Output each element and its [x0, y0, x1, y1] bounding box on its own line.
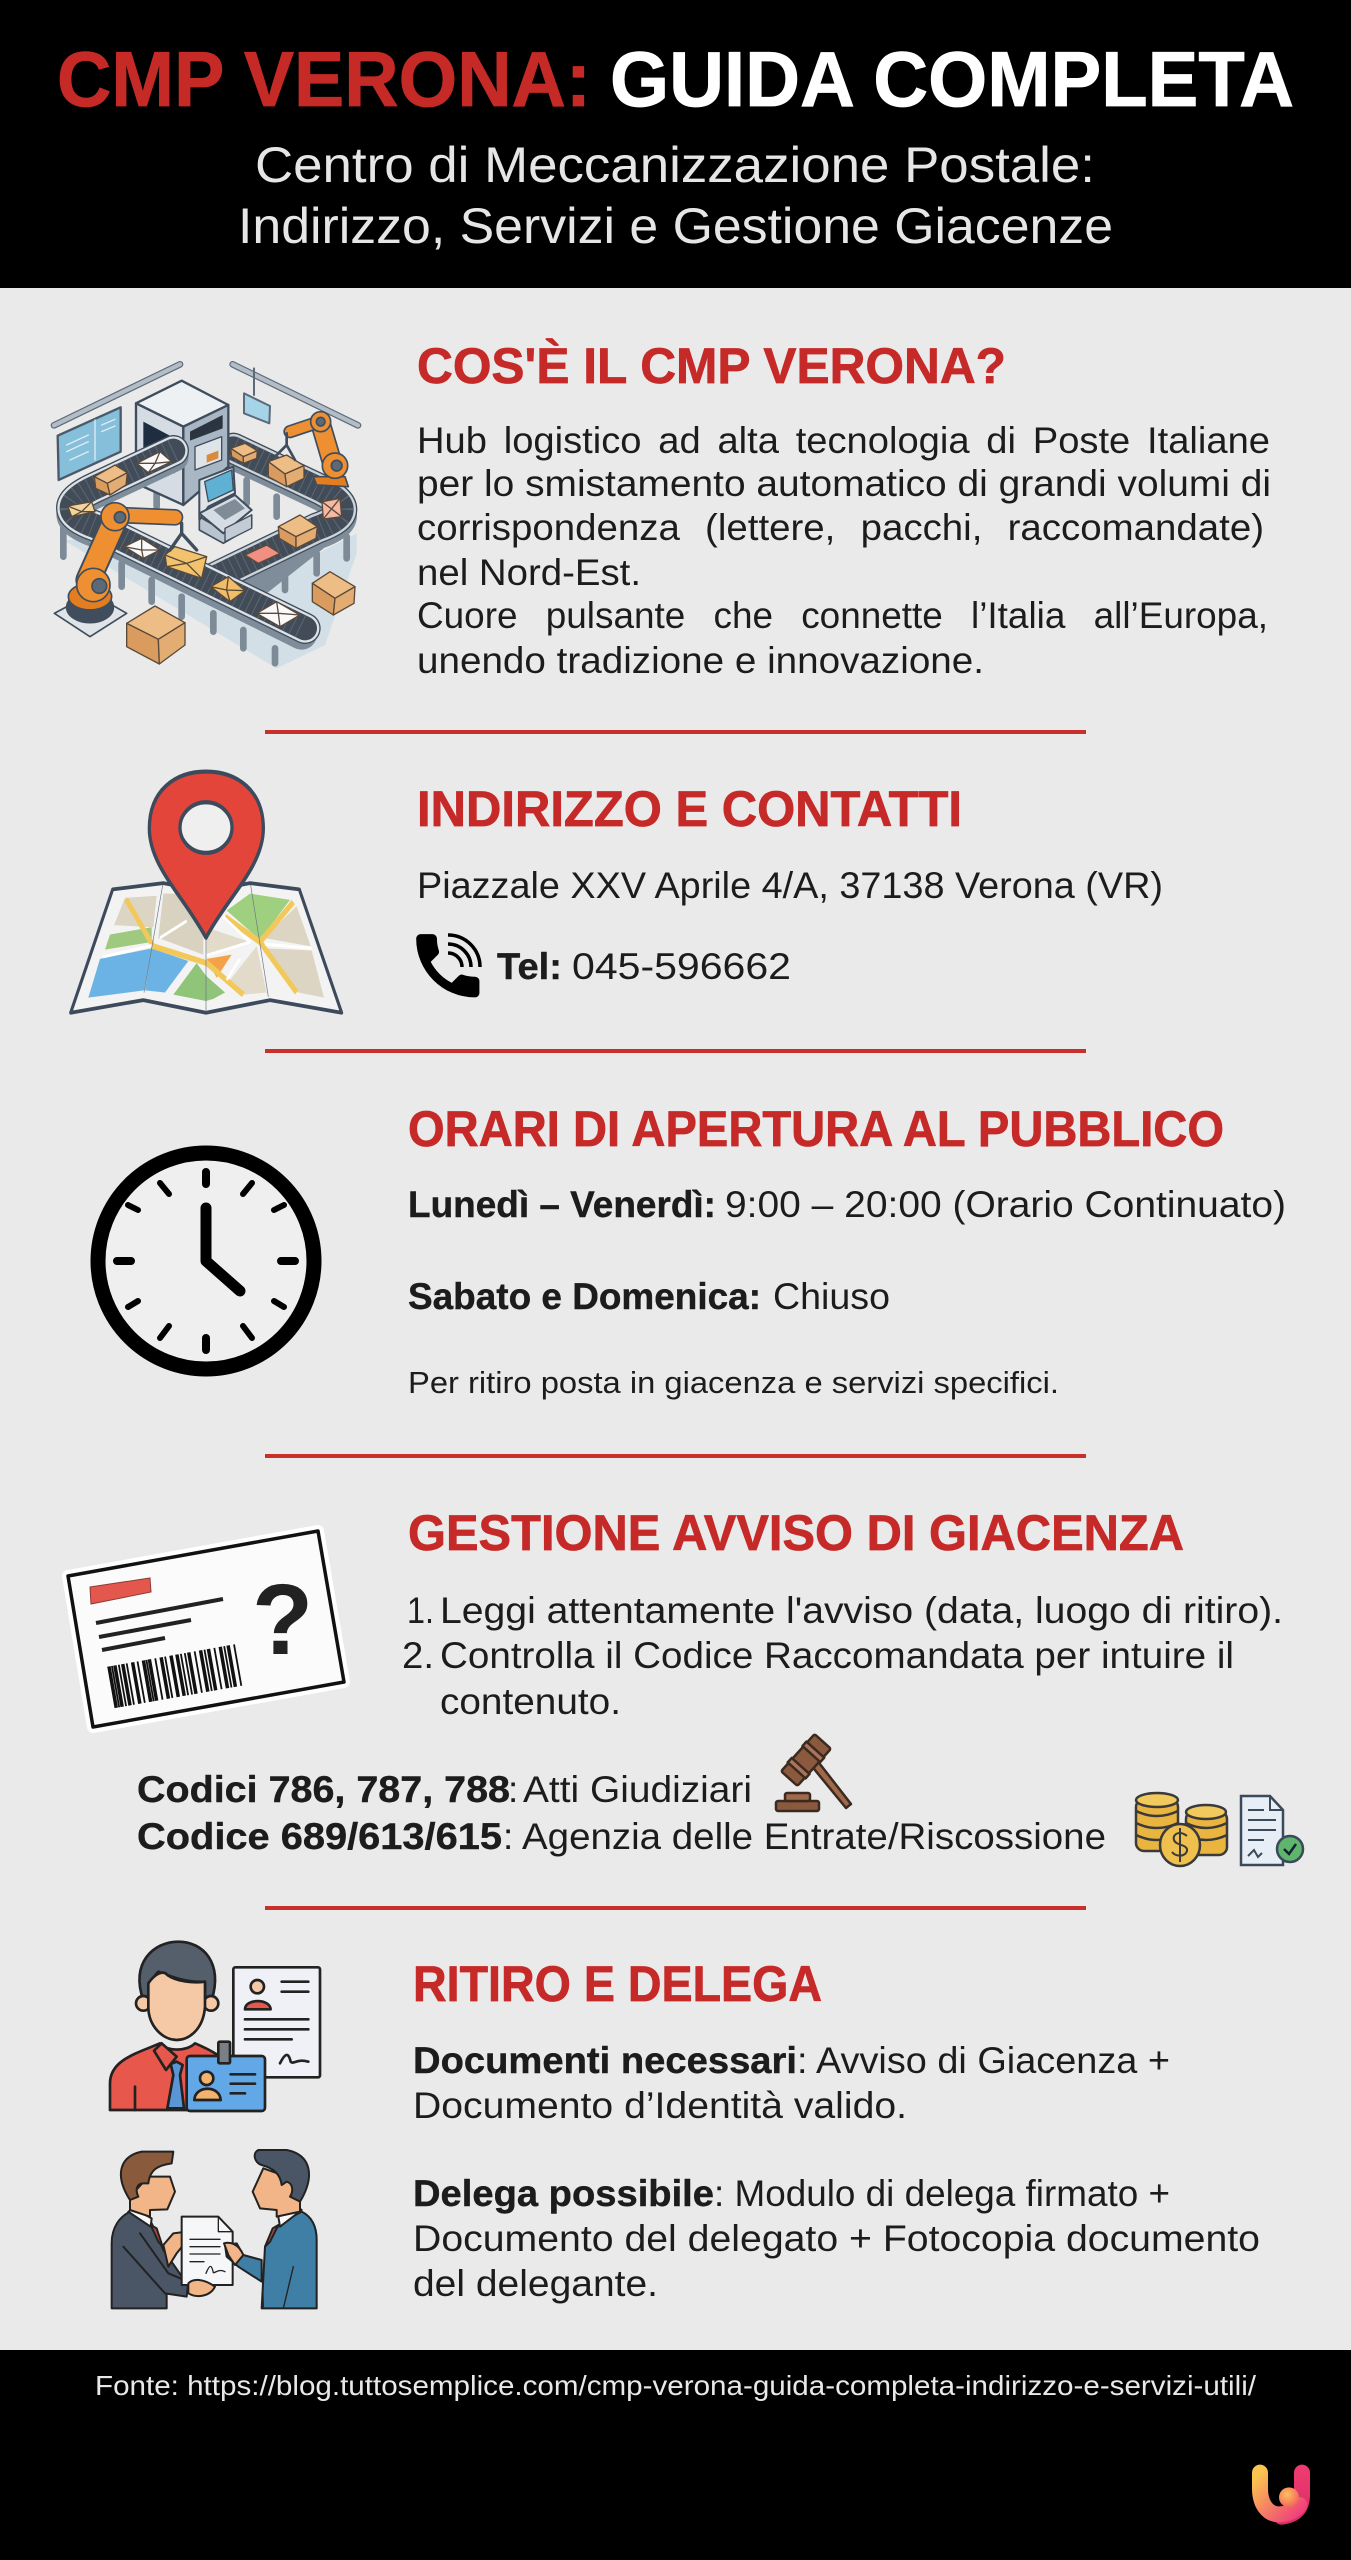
required documents: Documento d’Identità valido.: [413, 2085, 907, 2126]
codes: judicial: :: [508, 1769, 518, 1810]
description text: nel Nord-Est.: [417, 552, 641, 593]
icon: phone: [417, 935, 480, 996]
scanner machine: [136, 381, 228, 427]
codes: revenue agency: :: [503, 1816, 513, 1857]
panel: ritiro e delega: [110, 1942, 1260, 2308]
codes: judicial: [137, 1769, 752, 1810]
delegation: [413, 2173, 1260, 2304]
heading: orari: ORARI DI APERTURA AL PUBBLICO: [408, 1101, 1224, 1157]
codes: judicial: Atti Giudiziari: [523, 1769, 752, 1810]
source line: Fonte: https://blog.tuttosemplice.com/cmp-verona-guida-completa-indirizzo-e-servizi-utili/: [95, 2370, 1256, 2401]
header band: [0, 0, 1351, 288]
phone number: Tel:: [497, 946, 562, 987]
robot arm right: [275, 412, 348, 487]
steps list: contenuto.: [440, 1681, 621, 1722]
subtitle: Centro di Meccanizzazione Postale:: [255, 137, 1095, 193]
icon: coins and tax document: [1136, 1793, 1303, 1866]
icon: map with pin: [71, 772, 342, 1013]
note: Per ritiro posta in giacenza e servizi specifici.: [408, 1365, 1059, 1400]
weekend hours: Sabato e Domenica:: [408, 1276, 761, 1317]
terminal: [199, 515, 252, 543]
icon: notice with question mark: ?: [252, 1564, 313, 1676]
back belt: [233, 454, 342, 584]
heading: cos'è: COS'È IL CMP VERONA?: [417, 338, 1006, 394]
heading: indirizzo: INDIRIZZO E CONTATTI: [417, 781, 962, 837]
steps list: 1.: [407, 1590, 434, 1631]
weekday hours: 9:00 – 20:00 (Orario Continuato): [725, 1184, 1286, 1225]
panel: orari: [98, 1101, 1286, 1400]
subtitle: [238, 137, 1113, 254]
icon: notice with question mark: [68, 1531, 344, 1727]
parcels on belts: [68, 443, 355, 664]
robot arm left: [54, 503, 197, 637]
weekday hours: Lunedì – Venerdì:: [408, 1184, 716, 1225]
description text: corrispondenza (lettere, pacchi, raccomandate): [417, 507, 1264, 548]
icon: two people exchanging a delegation form: [112, 2150, 317, 2308]
icon: person with ID: [110, 1942, 320, 2111]
description text: Cuore pulsante che connette l’Italia all’Europa,: [417, 595, 1268, 636]
description text: Hub logistico ad alta tecnologia di Poste Italiane: [417, 420, 1270, 461]
icon: automated sorting factory: [54, 364, 358, 668]
weekend hours: Chiuso: [773, 1276, 890, 1317]
front belt: [72, 457, 302, 634]
icon: logo: [1260, 2473, 1302, 2517]
steps list: 2.: [402, 1635, 434, 1676]
steps list: [402, 1590, 1283, 1722]
description text: per lo smistamento automatico di grandi volumi di: [417, 463, 1271, 504]
title: [57, 35, 1294, 123]
required documents: : Avviso di Giacenza +: [797, 2040, 1170, 2081]
heading: ritiro: RITIRO E DELEGA: [413, 1956, 822, 2012]
phone number: 045-596662: [572, 946, 791, 987]
title: GUIDA COMPLETA: [610, 35, 1294, 123]
icon: clock: [98, 1153, 314, 1369]
subtitle: Indirizzo, Servizi e Gestione Giacenze: [238, 198, 1113, 254]
required documents: Documenti necessari: [413, 2040, 797, 2081]
icon: gavel: [776, 1733, 851, 1811]
codes: revenue agency: [137, 1816, 1106, 1857]
steps list: Controlla il Codice Raccomandata per intuire il: [440, 1635, 1234, 1676]
pin: [149, 772, 263, 938]
title: CMP VERONA:: [57, 35, 591, 123]
description text: [417, 420, 1271, 681]
weekday hours: [408, 1184, 1286, 1225]
description text: unendo tradizione e innovazione.: [417, 640, 984, 681]
panel: indirizzo e contatti: [71, 772, 1163, 1013]
codes: revenue agency: Agenzia delle Entrate/Riscossione: [522, 1816, 1106, 1857]
phone number: [497, 946, 791, 987]
required documents: [413, 2040, 1170, 2126]
delegation: Delega possibile: [413, 2173, 714, 2214]
delegation: Documento del delegato + Fotocopia documento: [413, 2218, 1260, 2259]
footer band: [0, 2350, 1351, 2560]
delegation: del delegante.: [413, 2263, 658, 2304]
codes: revenue agency: Codice 689/613/615: [137, 1816, 502, 1857]
address: Piazzale XXV Aprile 4/A, 37138 Verona (VR): [417, 865, 1163, 906]
heading: gestione: GESTIONE AVVISO DI GIACENZA: [408, 1505, 1184, 1561]
steps list: Leggi attentamente l'avviso (data, luogo di ritiro).: [440, 1590, 1283, 1631]
panel: cos'è il CMP Verona: [54, 338, 1271, 681]
codes: judicial: Codici 786, 787, 788: [137, 1769, 510, 1810]
delegation: : Modulo di delega firmato +: [714, 2173, 1170, 2214]
panel: gestione avviso di giacenza: [68, 1505, 1303, 1866]
